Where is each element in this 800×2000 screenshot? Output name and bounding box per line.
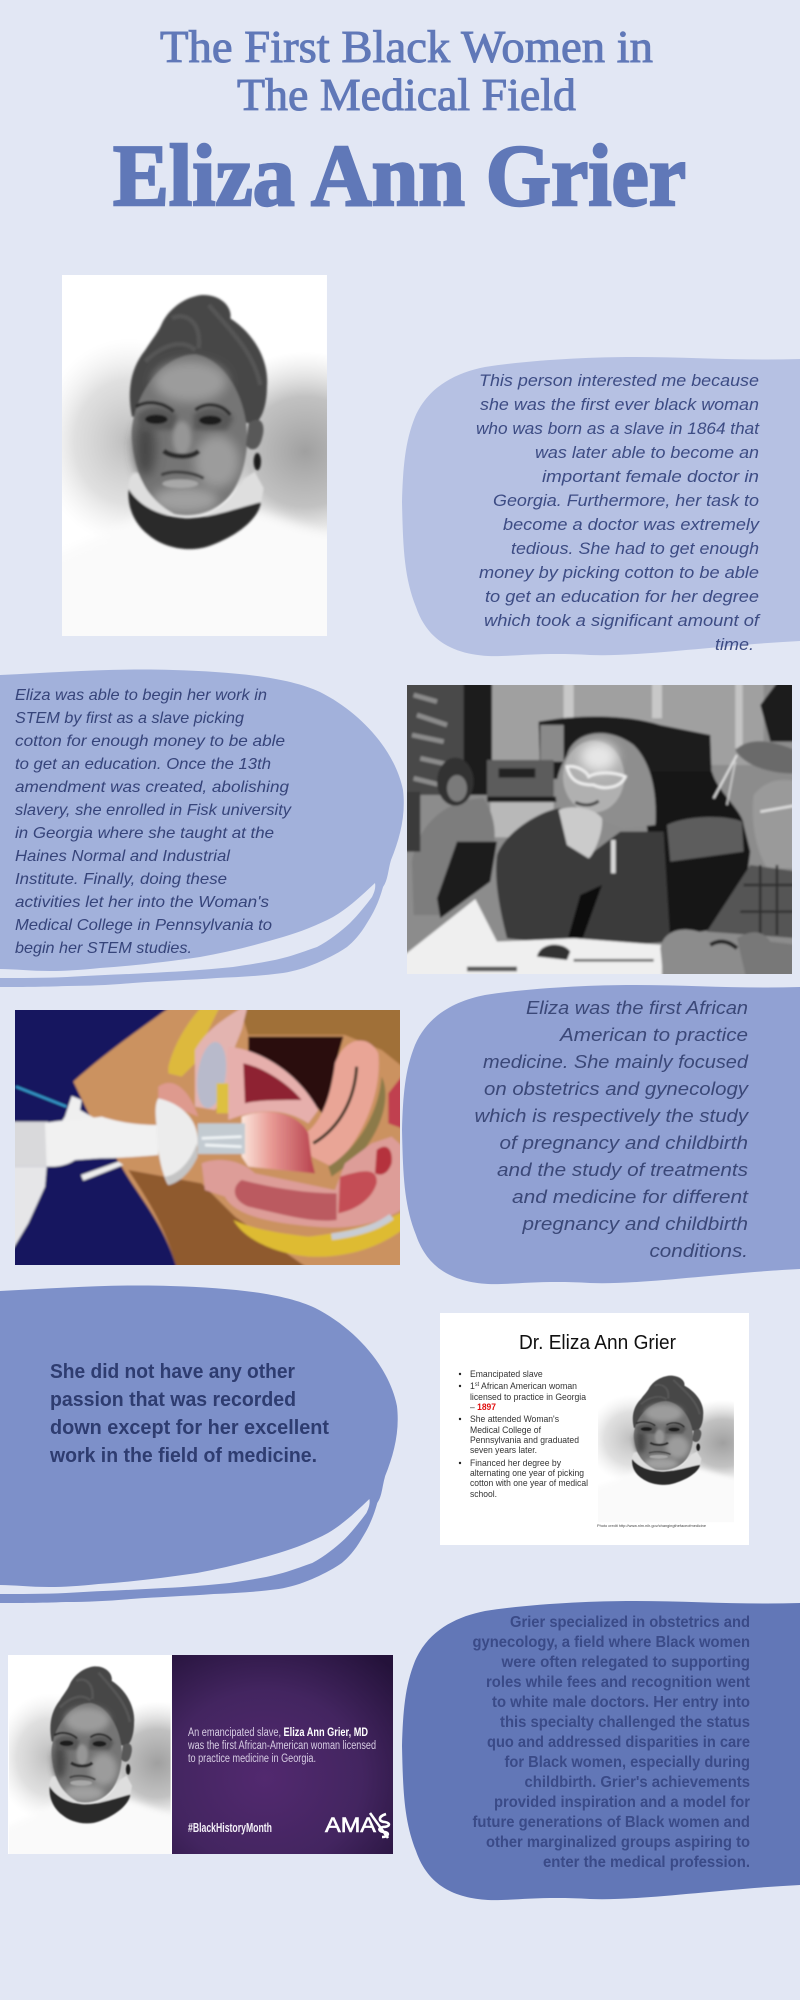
text: specialty paragraph: roles while fees and recognition went <box>486 1674 750 1691</box>
title: The Medical Field <box>237 69 576 120</box>
text: obstetrics paragraph: pregnancy and childbirth <box>521 1213 748 1234</box>
text: obstetrics paragraph: Eliza was the first African <box>526 997 748 1018</box>
slide title: Dr. Eliza Ann Grier <box>519 1332 676 1354</box>
text: obstetrics paragraph: and the study of treatments <box>497 1159 748 1180</box>
text: passion statement: down except for her excellent <box>50 1417 329 1439</box>
text: specialty paragraph: quo and addressed disparities in care <box>487 1734 750 1751</box>
panel: why this person is interesting <box>402 357 800 656</box>
text: interest paragraph: time. <box>715 636 754 654</box>
text: interest paragraph: which took a significant amount of <box>484 612 762 630</box>
card purple panel <box>172 1655 393 1854</box>
text: interest paragraph: she was the first ever black woman <box>480 396 759 414</box>
text: obstetrics paragraph: which is respectively the study <box>474 1105 750 1126</box>
text: STEM paragraph: slavery, she enrolled in Fisk university <box>15 802 292 819</box>
text: specialty paragraph: this specialty challenged the status <box>500 1714 750 1731</box>
panel: beginning her work in STEM <box>0 669 404 987</box>
slide bullet list: African American woman <box>479 1381 577 1392</box>
text: specialty paragraph: future generations of Black women and <box>472 1814 750 1831</box>
text: STEM paragraph <box>15 687 292 957</box>
text: passion statement: She did not have any other <box>50 1361 295 1383</box>
text: interest paragraph: become a doctor was extremely <box>503 516 761 534</box>
text: interest paragraph: was later able to become an <box>535 444 759 462</box>
text: passion statement: work in the field of medicine. <box>49 1445 317 1467</box>
slide bullet list: alternating one year of picking <box>470 1468 584 1479</box>
photo: portrait of Eliza Ann Grier <box>39 275 412 655</box>
text: specialty paragraph: enter the medical profession. <box>543 1854 750 1871</box>
slide portrait <box>586 1367 778 1530</box>
slide bullet list: Medical College of <box>470 1425 541 1436</box>
text: STEM paragraph: amendment was created, abolishing <box>15 779 289 796</box>
text: STEM paragraph: cotton for enough money to be able <box>15 733 285 750</box>
panel: impact on the specialty <box>402 1601 800 1900</box>
slide bullet list: She attended Woman's <box>470 1414 559 1425</box>
text: specialty paragraph <box>472 1614 750 1871</box>
card message: to practice medicine in Georgia. <box>188 1753 316 1765</box>
image: presentation slide about Dr. Eliza Ann Grier <box>440 1313 778 1545</box>
AMA logo <box>325 1813 389 1838</box>
text: obstetrics paragraph <box>474 997 750 1261</box>
slide photo credit: Photo credit http://www.nlm.nih.gov/changingthefaceofmedicine <box>597 1524 706 1528</box>
text: specialty paragraph: provided inspiration and a model for <box>494 1794 750 1811</box>
image: AMA Black History Month card <box>8 1655 393 1854</box>
text: obstetrics paragraph: and medicine for different <box>512 1186 749 1207</box>
text: interest paragraph: Georgia. Furthermore, her task to <box>493 492 759 510</box>
text: interest paragraph: This person interested me because <box>479 372 759 390</box>
AMA logo: AMA <box>325 1814 376 1837</box>
text: specialty paragraph: childbirth. Grier's achievements <box>524 1774 750 1791</box>
text: STEM paragraph: Eliza was able to begin her work in <box>15 687 267 704</box>
slide bullet list: Emancipated slave <box>470 1369 543 1380</box>
panel: first African American physician <box>402 985 800 1284</box>
card message <box>187 1727 376 1765</box>
text: STEM paragraph: Institute. Finally, doing these <box>15 871 227 888</box>
slide bullet list: school. <box>470 1489 497 1500</box>
text: passion statement <box>49 1361 329 1467</box>
text: obstetrics paragraph: American to practice <box>559 1024 748 1045</box>
slide bullet list: Pennsylvania and graduated <box>470 1435 579 1446</box>
text: obstetrics paragraph: of pregnancy and childbirth <box>500 1132 748 1153</box>
slide bullet list: 1 <box>470 1381 475 1392</box>
text: passion statement: passion that was recorded <box>50 1389 296 1411</box>
card portrait <box>8 1655 172 1854</box>
slide bullet list: st <box>475 1382 479 1388</box>
text: interest paragraph: tedious. She had to get enough <box>511 540 759 558</box>
text: specialty paragraph: were often relegated to supporting <box>501 1654 750 1671</box>
text: STEM paragraph: STEM by first as a slave picking <box>15 710 244 727</box>
text: STEM paragraph: activities let her into the Woman's <box>15 894 269 911</box>
slide bullet list: – 1897 <box>470 1402 496 1413</box>
text: STEM paragraph: Medical College in Pennsylvania to <box>15 917 272 934</box>
slide bullet list: cotton with one year of medical <box>470 1478 588 1489</box>
text: STEM paragraph: begin her STEM studies. <box>15 940 192 957</box>
slide bullet list: licensed to practice in Georgia <box>470 1392 587 1403</box>
text: interest paragraph: who was born as a slave in 1864 that <box>476 420 760 438</box>
text: interest paragraph: to get an education for her degree <box>485 588 759 606</box>
card message: An emancipated slave, Eliza Ann Grier, MD <box>188 1727 368 1739</box>
text: specialty paragraph: Grier specialized in obstetrics and <box>510 1614 750 1631</box>
text: interest paragraph: important female doctor in <box>542 468 759 486</box>
text: specialty paragraph: gynecology, a field where Black women <box>472 1634 750 1651</box>
heading: name: Eliza Ann Grier <box>113 128 686 225</box>
text: interest paragraph: money by picking cotton to be able <box>479 564 759 582</box>
title <box>113 21 686 225</box>
slide bullet list: Financed her degree by <box>470 1458 561 1469</box>
text: specialty paragraph: for Black women, especially during <box>504 1754 750 1771</box>
text: specialty paragraph: to white male doctors. Her entry into <box>492 1694 750 1711</box>
text: STEM paragraph: to get an education. Once the 13th <box>15 756 271 773</box>
text: interest paragraph <box>476 372 762 654</box>
photo: Eliza at a table with glasses <box>400 678 799 982</box>
text: obstetrics paragraph: medicine. She mainly focused <box>483 1051 749 1072</box>
text: STEM paragraph: Haines Normal and Industrial <box>15 848 230 865</box>
slide bullet list: seven years later. <box>470 1445 537 1456</box>
card hashtag: #BlackHistoryMonth <box>188 1820 272 1835</box>
text: specialty paragraph: other marginalized groups aspiring to <box>486 1834 750 1851</box>
text: obstetrics paragraph: conditions. <box>650 1240 748 1261</box>
title: The First Black Women in <box>160 21 653 72</box>
slide bullet list <box>459 1369 588 1500</box>
image: medical procedure illustration <box>8 1003 407 1273</box>
text: STEM paragraph: in Georgia where she taught at the <box>15 825 274 842</box>
panel: no other passion <box>0 1285 398 1603</box>
card message: was the first African-American woman licensed <box>187 1740 376 1752</box>
text: obstetrics paragraph: on obstetrics and gynecology <box>484 1078 750 1099</box>
